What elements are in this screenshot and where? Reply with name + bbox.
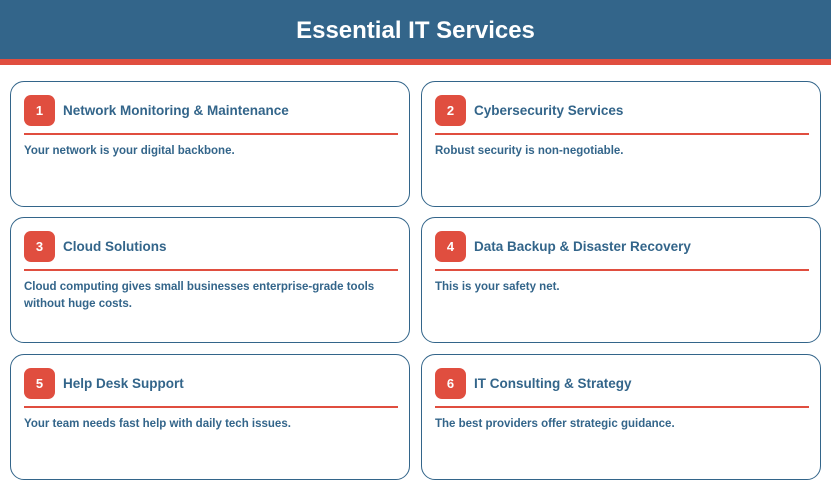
panel: cybersecurity: Robust security is non-negotiable. [435,145,624,157]
panel: cloud: Cloud computing gives small businesses enterprise-grade tools without huge costs. [24,281,374,310]
panel: consulting: IT Consulting & Strategy [474,376,632,391]
panel: cloud [10,217,410,343]
panel: help desk: Help Desk Support [63,376,184,391]
panel: network monitoring: Your network is your digital backbone. [24,145,235,157]
panel: backup: 4 [447,239,454,254]
panel: network monitoring: 1 [36,103,43,118]
panel: backup: This is your safety net. [435,281,560,293]
panel: help desk: Your team needs fast help with daily tech issues. [24,418,291,430]
title [0,0,831,59]
panel: help desk [10,354,410,480]
title: Essential IT Services [296,17,535,44]
panel: backup: Data Backup & Disaster Recovery [474,239,691,254]
panel: backup [421,217,821,343]
panel: help desk: 5 [36,376,43,391]
panel: consulting: 6 [447,376,454,391]
panel: consulting: The best providers offer strategic guidance. [435,418,675,430]
panel: cloud: 3 [36,239,43,254]
panel: consulting [421,354,821,480]
panel: network monitoring: Network Monitoring & Maintenance [63,103,289,118]
panel: cybersecurity: 2 [447,103,454,118]
panel: cybersecurity: Cybersecurity Services [474,103,623,118]
panel: cybersecurity [421,81,821,207]
panel: cloud: Cloud Solutions [63,239,166,254]
panel: network monitoring [10,81,410,207]
